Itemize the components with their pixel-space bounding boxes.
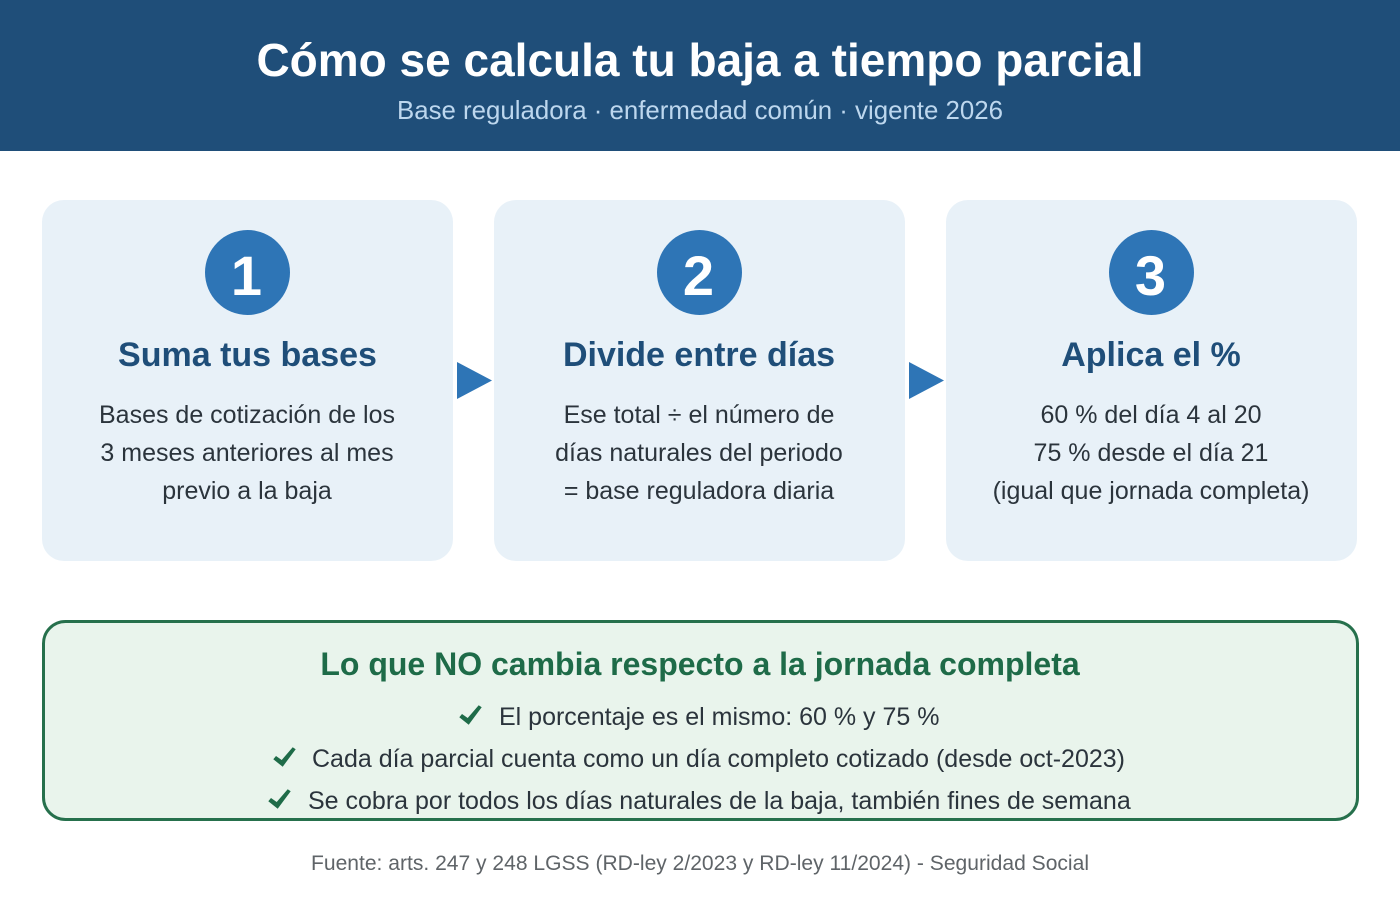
step 2 text: Ese total ÷ el número de — [564, 401, 834, 429]
step 2 heading: Divide entre días — [563, 336, 835, 374]
panel heading: Lo que NO cambia respecto a la jornada completa — [320, 646, 1080, 682]
step number 2: 2 — [683, 244, 714, 307]
check icon — [268, 789, 291, 809]
check item 2 — [273, 745, 1125, 773]
step number 1 — [205, 230, 290, 315]
step number 1: 1 — [231, 244, 262, 307]
check text: Cada día parcial cuenta como un día completo cotizado (desde oct-2023) — [312, 745, 1125, 773]
subtitle: Base reguladora · enfermedad común · vigente 2026 — [397, 95, 1003, 125]
panel: step 1 — [42, 200, 453, 561]
panel: step 3 — [946, 200, 1357, 561]
step 2 text: días naturales del periodo — [555, 439, 843, 467]
step 1 text: Bases de cotización de los — [99, 401, 395, 429]
panel: what does not change — [44, 622, 1358, 820]
check item 1 — [459, 703, 939, 731]
step 1 text: 3 meses anteriores al mes — [100, 439, 394, 467]
step number 3 — [1109, 230, 1194, 315]
check text: El porcentaje es el mismo: 60 % y 75 % — [499, 703, 939, 731]
check item 3 — [268, 787, 1131, 815]
check icon — [273, 747, 296, 767]
step 2 text: = base reguladora diaria — [564, 477, 834, 505]
title: Cómo se calcula tu baja a tiempo parcial — [256, 34, 1144, 86]
step 1 heading: Suma tus bases — [118, 336, 377, 374]
step 1 text — [99, 401, 395, 505]
check icon — [459, 705, 482, 725]
step 3 heading: Aplica el % — [1061, 336, 1241, 374]
panel: step 2 — [494, 200, 905, 561]
step 2 text — [555, 401, 843, 505]
step 1 text: previo a la baja — [162, 477, 332, 505]
step 3 text: (igual que jornada completa) — [993, 477, 1309, 505]
step number 3: 3 — [1135, 244, 1166, 307]
step 3 text: 60 % del día 4 al 20 — [1040, 401, 1262, 429]
header band — [0, 0, 1400, 151]
arrow: step 2 to 3 — [909, 362, 944, 399]
source footnote: Fuente: arts. 247 y 248 LGSS (RD-ley 2/2023 y RD-ley 11/2024) - Seguridad Social — [311, 852, 1089, 875]
check text: Se cobra por todos los días naturales de la baja, también fines de semana — [308, 787, 1131, 815]
arrow: step 1 to 2 — [457, 362, 492, 399]
step 3 text: 75 % desde el día 21 — [1034, 439, 1268, 467]
step number 2 — [657, 230, 742, 315]
step 3 text — [993, 401, 1309, 505]
